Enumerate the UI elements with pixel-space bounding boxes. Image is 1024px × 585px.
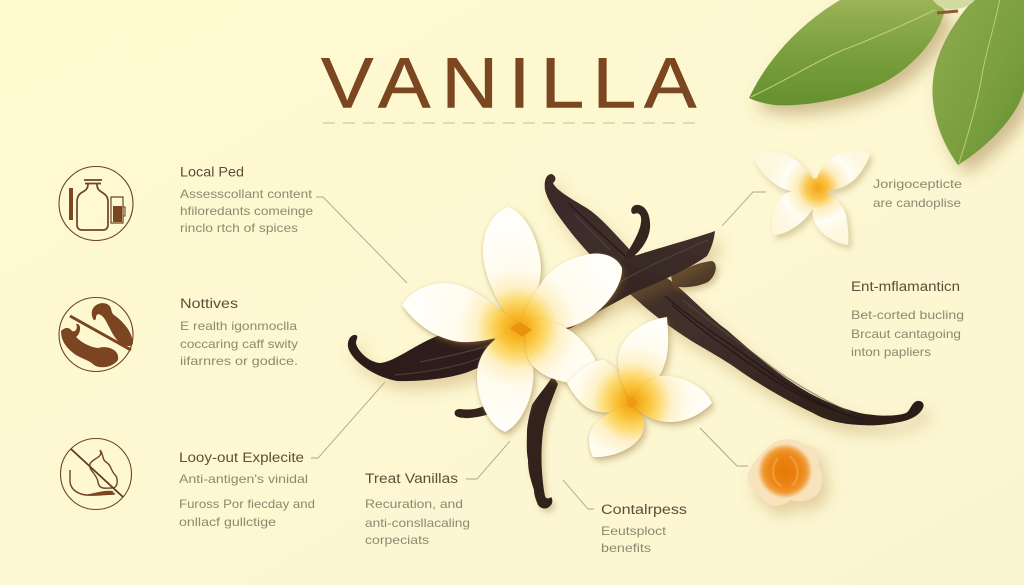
illustration: green leaves xyxy=(749,0,1024,165)
illustration: small vanilla flower xyxy=(753,151,870,245)
flower heart xyxy=(616,386,648,418)
petal: upper left xyxy=(753,152,819,192)
text block: treat vanillas xyxy=(365,471,470,547)
text block: looy-out explecite xyxy=(179,450,315,529)
leaf: left xyxy=(749,0,945,105)
text block: treat vanillas: Recuration, and xyxy=(365,497,463,511)
pod: long diagonal xyxy=(545,174,924,425)
title dashed rule xyxy=(323,122,698,124)
text block: treat vanillas: corpeciats xyxy=(365,533,429,547)
petal: left xyxy=(567,360,634,412)
text block: ent-mflamanticn: Ent-mflamanticn xyxy=(851,279,960,294)
flower centre xyxy=(627,398,637,408)
text block: local ped: Assesscollant content xyxy=(180,187,313,201)
petal: lower right xyxy=(813,188,848,245)
text block: local ped: Local Ped xyxy=(180,164,244,180)
leader: top flower xyxy=(722,192,766,226)
leader: orange flower xyxy=(700,428,748,466)
text block: local ped: rinclo rtch of spices xyxy=(180,221,298,235)
petal: top xyxy=(483,207,541,330)
petal: upper right xyxy=(815,151,870,191)
petal: lower xyxy=(477,330,533,432)
fruit: green xyxy=(862,0,932,11)
text block: top right note xyxy=(873,177,962,210)
leaf: right xyxy=(932,0,1024,165)
flower core xyxy=(759,445,811,497)
text block: nottives: Nottives xyxy=(180,296,238,311)
text block: top right note: Jorigocepticte xyxy=(873,177,962,191)
text block: nottives: E realth igonmoclla xyxy=(180,319,297,333)
text block: treat vanillas: anti-consllacaling xyxy=(365,516,470,530)
fruit: pale xyxy=(932,0,976,9)
illustration: large vanilla flower xyxy=(402,207,622,432)
text block: nottives xyxy=(180,296,298,368)
pod: small tail lower left xyxy=(455,403,495,418)
pod: stub right xyxy=(671,261,716,287)
text block: treat vanillas: Treat Vanillas xyxy=(365,471,458,486)
petal: upper right xyxy=(520,254,622,330)
text block: looy-out explecite: Fuross Por fiecday and xyxy=(179,497,315,511)
leader: treat vanillas xyxy=(466,441,510,479)
text block: looy-out explecite: onllacf gullctige xyxy=(179,515,276,529)
text block: local ped: hfiloredants comeinge xyxy=(180,204,313,218)
icon: crossed vanilla pods xyxy=(59,298,133,372)
petal: lower left xyxy=(772,189,819,235)
leader: looy-out xyxy=(311,382,385,458)
text block: looy-out explecite: Looy-out Explecite xyxy=(179,450,304,465)
petal: lower right xyxy=(526,319,602,384)
icon: crossed plant outline xyxy=(60,438,132,510)
petal: top xyxy=(618,317,668,402)
petal: right xyxy=(630,376,712,422)
text block: top right note: are candoplise xyxy=(873,196,961,210)
text block: ent-mflamanticn: Brcaut cantagoing xyxy=(851,327,961,341)
leader: contalrpess xyxy=(563,480,594,509)
text block: ent-mflamanticn xyxy=(851,279,964,359)
leader lines xyxy=(311,192,766,509)
text block: nottives: coccaring caff swity xyxy=(180,337,298,351)
text block: ent-mflamanticn: inton papliers xyxy=(851,345,931,359)
title: VANILLA xyxy=(321,43,697,123)
leaf stem xyxy=(937,11,958,13)
text block: contalrpess xyxy=(601,502,687,555)
pod: left to right xyxy=(348,231,715,381)
illustration: small orange flower xyxy=(748,439,822,506)
flower heart xyxy=(808,178,828,198)
petal: lower xyxy=(589,403,644,457)
petal: left xyxy=(402,283,520,342)
illustration: vanilla pods xyxy=(348,174,924,509)
flower core detail xyxy=(773,456,798,486)
pod: small curl top xyxy=(624,205,650,258)
illustration: medium vanilla flower xyxy=(567,317,712,457)
pod: lower vertical xyxy=(527,376,558,509)
flower centre xyxy=(510,322,532,337)
text block: looy-out explecite: Anti-antigen's vinidal xyxy=(179,472,308,486)
flower petals xyxy=(748,439,822,506)
text block: local ped xyxy=(180,164,313,235)
text block: contalrpess: benefits xyxy=(601,541,651,555)
icon: bottle and mug xyxy=(59,166,133,240)
leader: local ped xyxy=(316,197,407,283)
text block: ent-mflamanticn: Bet-corted bucling xyxy=(851,308,964,322)
text block: contalrpess: Eeutsploct xyxy=(601,524,667,538)
text block: contalrpess: Contalrpess xyxy=(601,502,687,517)
flower heart xyxy=(492,302,544,354)
text block: nottives: iifarnres or godice. xyxy=(180,354,298,368)
